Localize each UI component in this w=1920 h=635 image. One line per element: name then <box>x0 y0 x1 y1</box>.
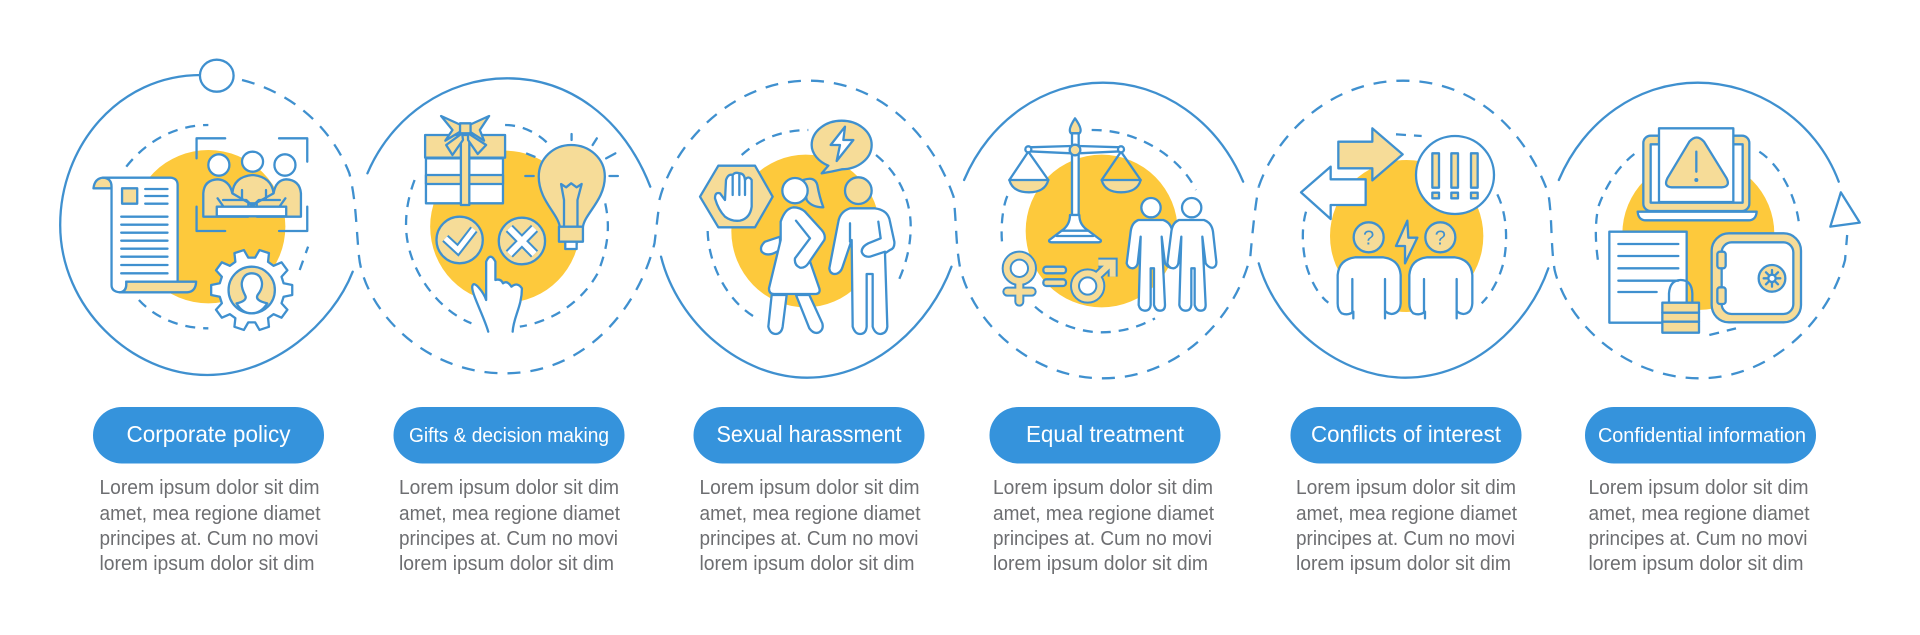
text block: confidential information: Lorem ipsum dolor sit dim <box>1588 477 1808 499</box>
document scroll <box>93 178 196 292</box>
text block: equal treatment: Lorem ipsum dolor sit dim <box>993 477 1213 499</box>
text block: corporate policy: amet, mea regione diamet <box>100 503 321 525</box>
pill: equal treatment <box>990 407 1220 464</box>
confused people with bolt <box>1338 221 1472 318</box>
text block: gifts and decision making: lorem ipsum dolor sit dim <box>399 553 614 575</box>
inner dashed ring <box>126 125 308 328</box>
text block: conflicts of interest: amet, mea regione diamet <box>1296 503 1517 525</box>
exclamation circle <box>1416 136 1494 214</box>
panel 4: equal treatment icon <box>1002 118 1216 332</box>
light bulb <box>525 134 618 249</box>
text block: confidential information: lorem ipsum dolor sit dim <box>1588 553 1804 575</box>
pill: corporate policy: Corporate policy <box>126 421 291 447</box>
pill: conflicts of interest: Conflicts of interest <box>1311 421 1502 447</box>
panels 1 and 2 graphics <box>60 60 660 375</box>
outer rings and connecting dashed paths, panels 3 to 6 <box>659 81 1860 378</box>
yellow blob <box>731 155 880 307</box>
woman figure <box>761 178 825 334</box>
venus symbol <box>1007 256 1032 302</box>
panel 2: gifts and decision making icon <box>367 78 650 332</box>
yellow blob <box>1330 160 1483 312</box>
two men <box>1127 198 1216 311</box>
text block: sexual harassment: lorem ipsum dolor sit dim <box>700 553 914 575</box>
text block: gifts and decision making: Lorem ipsum dolor sit dim <box>399 477 619 499</box>
outer solid ring <box>367 78 650 187</box>
pill: confidential information <box>1585 407 1816 464</box>
yellow blob <box>131 150 285 303</box>
panel 5: conflicts of interest icon <box>1301 128 1506 318</box>
text block: sexual harassment: amet, mea regione diamet <box>700 503 921 525</box>
text block: gifts and decision making: principes at. Cum no movi <box>399 528 618 550</box>
inner dashed ring <box>406 125 608 327</box>
panel 1: corporate policy icon <box>60 75 353 375</box>
inner dashed ring <box>1303 134 1506 303</box>
stop hand hexagon <box>700 166 773 227</box>
inner dashed ring <box>708 130 911 320</box>
pill: gifts and decision making: Gifts & decision making <box>409 424 609 447</box>
text block: confidential information: principes at. Cum no movi <box>1588 528 1808 550</box>
connecting dashed path <box>242 80 660 373</box>
yellow blob <box>430 151 580 303</box>
inner dashed ring <box>1002 130 1196 332</box>
outer solid ring <box>60 75 353 375</box>
pill: confidential information: Confidential information <box>1598 424 1806 447</box>
text block: equal treatment: lorem ipsum dolor sit dim <box>993 553 1208 575</box>
pill: conflicts of interest <box>1290 407 1522 464</box>
check button <box>436 217 483 263</box>
text block: conflicts of interest: Lorem ipsum dolor sit dim <box>1296 477 1516 499</box>
text block: corporate policy: lorem ipsum dolor sit dim <box>100 553 314 575</box>
yellow blob <box>1026 155 1178 307</box>
pill: gifts and decision making <box>394 407 624 464</box>
label pills <box>93 407 1816 464</box>
confused people with bolt: ? <box>1435 227 1446 249</box>
text block: confidential information: amet, mea regione diamet <box>1588 503 1810 525</box>
mars symbol <box>1075 263 1113 299</box>
gear with person <box>211 250 292 330</box>
left arrow <box>1301 167 1366 219</box>
panel 3: sexual harassment icon <box>700 121 911 334</box>
rings panels 3 and 4 <box>659 81 1259 378</box>
cross button <box>499 218 545 264</box>
text block: conflicts of interest: lorem ipsum dolor sit dim <box>1296 553 1511 575</box>
safe <box>1712 233 1801 322</box>
padlock <box>1662 280 1699 333</box>
confused people with bolt: ? <box>1363 227 1374 249</box>
man figure <box>829 177 894 334</box>
pill: sexual harassment: Sexual harassment <box>716 421 902 447</box>
text block: equal treatment: principes at. Cum no movi <box>993 528 1212 550</box>
pill: corporate policy <box>93 407 324 464</box>
rings panels 5 and 6 <box>1259 81 1860 378</box>
pill: sexual harassment <box>694 407 924 464</box>
equals sign <box>1043 267 1066 286</box>
balance scales <box>1009 118 1141 242</box>
start node circle <box>200 60 234 92</box>
text block: gifts and decision making: amet, mea regione diamet <box>399 503 620 525</box>
inner dashed ring <box>1596 152 1799 335</box>
pointing hand <box>472 257 522 332</box>
meeting people at table <box>197 138 307 231</box>
text block: equal treatment: amet, mea regione diamet <box>993 503 1214 525</box>
gift box <box>425 116 505 205</box>
laptop with warning <box>1638 128 1757 220</box>
speech bubble with bolt <box>812 121 872 173</box>
document <box>1609 232 1687 323</box>
text block: sexual harassment: Lorem ipsum dolor sit dim <box>700 477 920 499</box>
pill: equal treatment: Equal treatment <box>1026 421 1185 447</box>
panel 6: confidential information icon <box>1596 128 1801 335</box>
text block: corporate policy: principes at. Cum no movi <box>100 528 318 550</box>
yellow blob <box>1622 158 1774 310</box>
body text columns <box>100 477 1815 575</box>
right arrow <box>1338 128 1403 180</box>
text block: conflicts of interest: principes at. Cum no movi <box>1296 528 1515 550</box>
text block: sexual harassment: principes at. Cum no movi <box>700 528 918 550</box>
text block: corporate policy: Lorem ipsum dolor sit dim <box>100 477 320 499</box>
